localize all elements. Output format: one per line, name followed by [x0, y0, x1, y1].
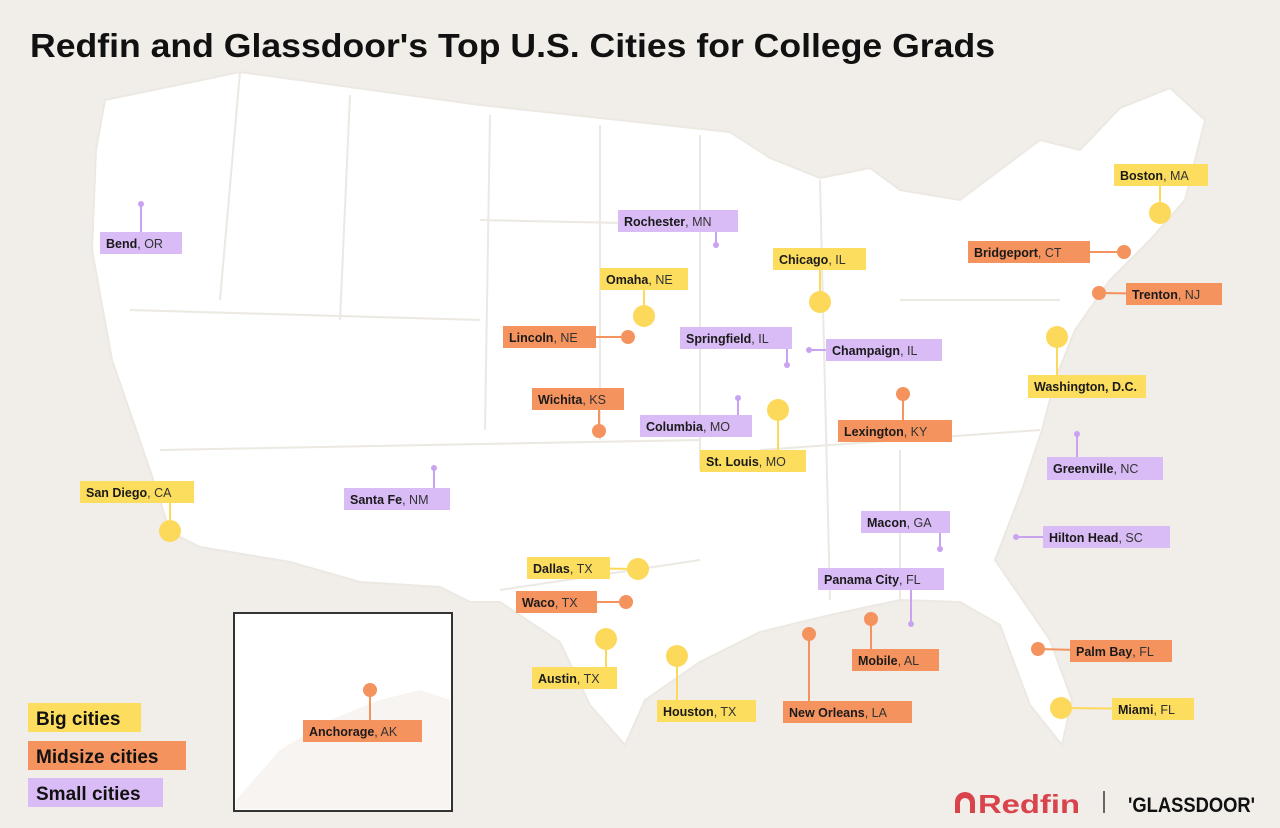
city: Lincoln NE: [503, 326, 635, 348]
legend: small cities: Small cities: [36, 784, 141, 805]
city: Panama City FL: [818, 568, 944, 627]
city: Palm Bay FL: Palm Bay, FL: [1076, 645, 1154, 659]
city: Springfield IL: Springfield, IL: [686, 332, 769, 346]
logos: [955, 789, 1255, 819]
city: Columbia MO: Columbia, MO: [646, 420, 730, 434]
city: Hilton Head SC: Hilton Head, SC: [1049, 531, 1143, 545]
city: Bridgeport CT: Bridgeport, CT: [974, 246, 1062, 260]
city: Houston TX: [657, 645, 756, 722]
city: Washington DC: [1028, 326, 1146, 398]
city: Palm Bay FL: [1031, 640, 1172, 662]
logo: Redfin: [955, 789, 1080, 819]
city: Bend OR: Bend, OR: [106, 237, 163, 251]
alaska inset: [234, 613, 452, 811]
city: Champaign IL: Champaign, IL: [832, 344, 917, 358]
legend: big cities: Big cities: [36, 709, 120, 730]
map: contiguous US: [92, 72, 1205, 745]
city: Panama City FL: Panama City, FL: [824, 573, 921, 587]
city: New Orleans LA: [783, 627, 912, 723]
legend: big cities: [28, 703, 141, 732]
city: St. Louis MO: St. Louis, MO: [706, 455, 786, 469]
city: Austin TX: Austin, TX: [538, 672, 600, 686]
city: Boston MA: Boston, MA: [1120, 169, 1189, 183]
city: Rochester MN: Rochester, MN: [624, 215, 712, 229]
legend: midsize cities: [28, 741, 186, 770]
legend: [28, 703, 186, 807]
city: Lincoln NE: Lincoln, NE: [509, 331, 578, 345]
city: Santa Fe NM: [344, 465, 450, 510]
city: Macon GA: Macon, GA: [867, 516, 932, 530]
city: Waco TX: Waco, TX: [522, 596, 578, 610]
city: San Diego CA: [80, 481, 194, 542]
city: Washington DC: Washington, D.C.: [1034, 380, 1137, 394]
city: Dallas TX: Dallas, TX: [533, 562, 593, 576]
city: Mobile AL: [852, 612, 939, 671]
title: Redfin and Glassdoor's Top U.S. Cities for College Grads: [30, 27, 995, 64]
city: Rochester MN: [618, 210, 738, 248]
city: Dallas TX: [527, 557, 649, 580]
city: Springfield IL: [680, 327, 792, 368]
city: Champaign IL: [806, 339, 942, 361]
legend: midsize cities: Midsize cities: [36, 747, 158, 768]
city: Miami FL: [1050, 697, 1194, 720]
city: Lexington KY: [838, 387, 952, 442]
city: Trenton NJ: Trenton, NJ: [1132, 288, 1200, 302]
city: Columbia MO: [640, 395, 752, 437]
city: New Orleans LA: New Orleans, LA: [789, 706, 888, 720]
city: Omaha NE: Omaha, NE: [606, 273, 673, 287]
city: Miami FL: Miami, FL: [1118, 703, 1175, 717]
city: Wichita KS: [532, 388, 624, 438]
city: Hilton Head SC: [1013, 526, 1170, 548]
city: Wichita KS: Wichita, KS: [538, 393, 606, 407]
city: San Diego CA: San Diego, CA: [86, 486, 172, 500]
city: Austin TX: [532, 628, 617, 689]
city: Greenville NC: Greenville, NC: [1053, 462, 1138, 476]
city: Macon GA: [861, 511, 950, 552]
city: St. Louis MO: [700, 399, 806, 472]
city: Bridgeport CT: [968, 241, 1131, 263]
logo: Glassdoor: 'GLASSDOOR': [1128, 794, 1255, 817]
city: Santa Fe NM: Santa Fe, NM: [350, 493, 428, 507]
city: Anchorage AK: [303, 683, 422, 742]
legend: small cities: [28, 778, 163, 807]
city: Houston TX: Houston, TX: [663, 705, 737, 719]
city: Greenville NC: [1047, 431, 1163, 480]
city: Boston MA: [1114, 164, 1208, 224]
city: Omaha NE: [600, 268, 688, 327]
city: Mobile AL: Mobile, AL: [858, 654, 919, 668]
city: Chicago IL: Chicago, IL: [779, 253, 846, 267]
city: Trenton NJ: [1092, 283, 1222, 305]
city: Anchorage AK: Anchorage, AK: [309, 725, 398, 739]
logo: Redfin: Redfin: [978, 789, 1080, 819]
city: Waco TX: [516, 591, 633, 613]
city: Chicago IL: [773, 248, 866, 313]
city: Bend OR: [100, 201, 182, 254]
city: Lexington KY: Lexington, KY: [844, 425, 928, 439]
